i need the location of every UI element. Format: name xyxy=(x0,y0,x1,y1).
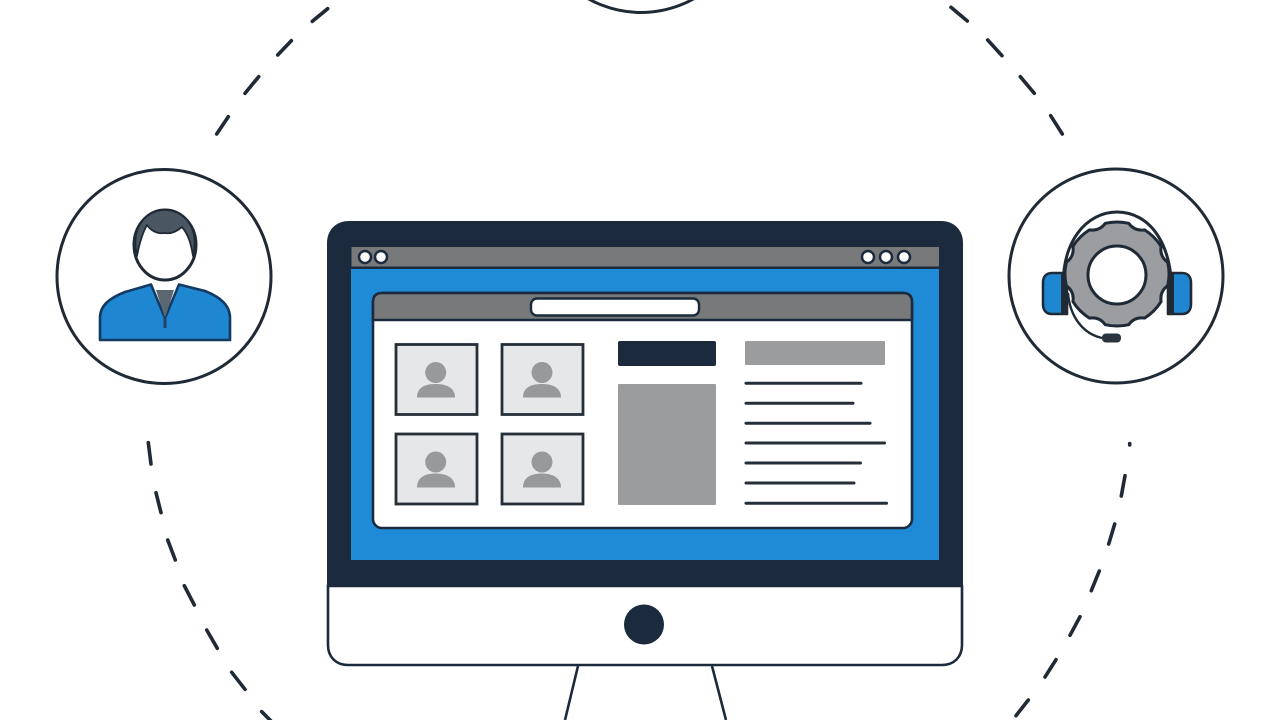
inner window header xyxy=(373,293,912,320)
left ear cup xyxy=(1043,273,1067,314)
monitor xyxy=(327,221,963,665)
profile tile 2 xyxy=(502,344,583,414)
left ear cup inner band xyxy=(1061,273,1067,314)
profile tile 4 xyxy=(502,434,583,504)
dashed orbit ring xyxy=(148,7,1130,720)
top node circle (cropped) xyxy=(533,0,749,12)
monitor chin xyxy=(328,586,962,665)
grey heading bar xyxy=(745,341,885,365)
dark heading bar xyxy=(618,341,716,366)
browser title bar xyxy=(351,247,939,269)
icon: user in circle xyxy=(57,170,271,384)
blue screen xyxy=(351,268,939,560)
window dots right xyxy=(862,251,910,263)
microphone xyxy=(1102,334,1121,342)
power button xyxy=(624,604,664,644)
user body xyxy=(100,284,230,340)
gear hole xyxy=(1088,246,1146,304)
profile tile 1 xyxy=(396,344,477,414)
grey content block xyxy=(618,384,716,505)
window dots left xyxy=(359,251,387,263)
user tie line xyxy=(164,316,166,328)
profile tile 3 xyxy=(396,434,477,504)
microphone boom xyxy=(1068,293,1102,338)
gear xyxy=(1065,222,1169,326)
user head xyxy=(134,210,196,280)
right ear cup inner band xyxy=(1168,273,1174,314)
headband xyxy=(1063,212,1172,312)
inner window xyxy=(373,293,912,528)
address field xyxy=(531,298,699,316)
monitor bezel xyxy=(327,221,963,586)
user hair xyxy=(135,210,195,256)
icon: support gear with headset in circle xyxy=(1009,169,1223,383)
monitor stand xyxy=(565,666,726,720)
user collar xyxy=(156,290,174,318)
right ear cup xyxy=(1168,273,1191,314)
text lines xyxy=(746,383,886,503)
